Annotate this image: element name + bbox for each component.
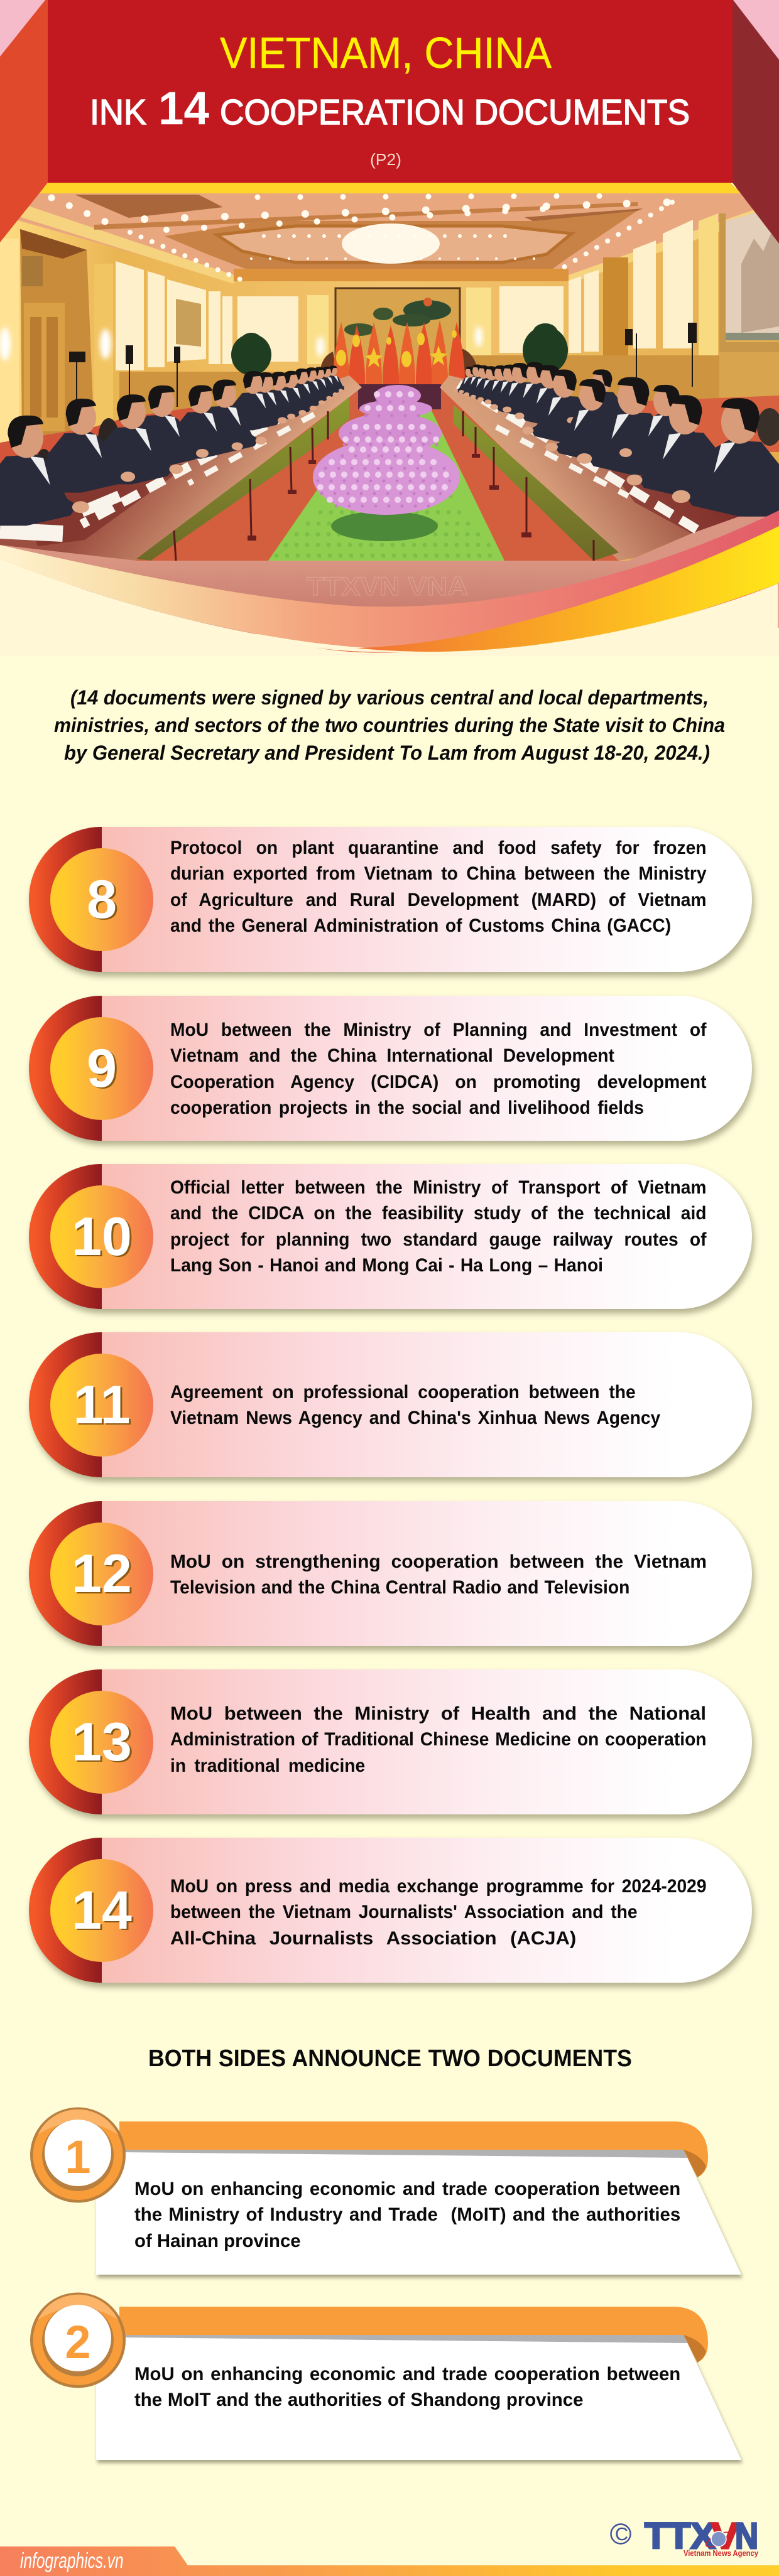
logo: TTXVN [610,2518,759,2558]
card 1 text: of Hainan province [134,2231,301,2251]
photo: delegates left [0,365,348,525]
logo: copyright mark: C [615,2525,628,2545]
footer bar [0,2546,779,2576]
item 10 text: project for planning two standard gauge railway routes of [170,1229,707,1250]
item 13 text: in traditional medicine [170,1755,365,1776]
item 9 text: MoU between the Ministry of Planning and Investment of [170,1020,707,1040]
item 8 text: durian exported from Vietnam to China between the Ministry [170,863,707,884]
item 14 panel [27,1838,758,1991]
number 12: 12 [72,1544,132,1604]
photo: ceiling [0,188,779,284]
number 9: 9 [87,1038,117,1099]
card 2 text [134,2363,680,2410]
number 14: 14 [72,1880,132,1941]
item 8 panel [27,827,758,980]
card 1 [30,2107,744,2280]
item 14 text: MoU on press and media exchange programme for 2024-2029 [170,1876,707,1897]
section heading: BOTH SIDES ANNOUNCE TWO DOCUMENTS [148,2045,632,2072]
item 14 text: All-China Journalists Association (ACJA) [170,1928,576,1949]
item 8 text: Protocol on plant quarantine and food safety for frozen [170,838,707,858]
photo: painting [335,288,460,385]
photo: table right [440,375,779,561]
intro text [54,686,725,764]
header with conference photo [0,0,779,653]
photo: meeting room [0,188,779,634]
item 9 text [170,1020,707,1118]
item 10 panel [27,1164,758,1317]
item 12 text: Television and the China Central Radio and Television [170,1577,629,1598]
item 10 text: Lang Son - Hanoi and Mong Cai - Ha Long – Hanoi [170,1255,603,1276]
card 2 text: MoU on enhancing economic and trade cooperation between [134,2363,680,2385]
card 2 text: the MoIT and the authorities of Shandong province [134,2390,583,2410]
item 11 text: Vietnam News Agency and China's Xinhua News Agency [170,1408,660,1428]
intro text: (14 documents were signed by various central and local departments, [70,686,709,709]
item 10 text: Official letter between the Ministry of Transport of Vietnam [170,1177,707,1198]
item 11 text: Agreement on professional cooperation between the [170,1382,636,1403]
item 8 text [170,838,707,936]
number 8: 8 [87,870,117,930]
card 2 number: 2 [65,2315,91,2368]
card 1 text: the Ministry of Industry and Trade (MoIT) and the authorities [134,2204,680,2225]
number 10: 10 [72,1207,132,1267]
photo: green foliage [268,408,504,561]
item 13 text: MoU between the Ministry of Health and the National [170,1703,706,1724]
photo: flags [333,320,465,384]
photo: table left [0,375,362,561]
photo: documents on the table [0,384,704,534]
item 10 text: and the CIDCA on the feasibility study of the technical aid [170,1203,707,1224]
title line 2: COOPERATION DOCUMENTS [220,92,690,132]
item 8 text: and the General Administration of Customs China (GACC) [170,915,671,936]
photo: floor and carpet [0,384,779,561]
item 13 text [170,1703,707,1776]
item 9 panel [27,996,758,1149]
logo: copyright mark [611,2524,631,2545]
card 2 [30,2293,744,2466]
title line 1: VIETNAM, CHINA [220,28,552,77]
title line 2 [90,82,690,134]
photo: watermark: TTXVN VNA [307,571,468,601]
logo: letters [645,2516,758,2557]
number 13: 13 [72,1712,132,1772]
number 11: 11 [74,1375,130,1435]
photo: delegates right [454,362,779,517]
item 10 text [170,1177,707,1276]
photo: orchid flowers [313,385,460,541]
red title banner [48,0,733,183]
photo: plants [231,323,568,375]
card 1 text [134,2179,680,2251]
item 9 text: cooperation projects in the social and livelihood fields [170,1097,644,1118]
item 14 text [170,1876,707,1949]
item 12 text [170,1551,707,1598]
part label: (P2) [370,150,401,169]
curved swoosh [0,510,779,656]
title line 2: INK [90,92,146,132]
photo: stanchions [174,411,594,561]
logo: globe [704,2529,733,2550]
item 8 text: of Agriculture and Rural Development (MARD) of Vietnam [170,890,707,910]
top right fold [733,0,779,244]
intro text: by General Secretary and President To Lam from August 18-20, 2024.) [64,741,710,764]
card 1 text: MoU on enhancing economic and trade cooperation between [134,2179,680,2199]
item 11 text [170,1382,660,1428]
item 11 panel [27,1332,758,1485]
top left fold [0,0,48,242]
item 9 text: Cooperation Agency (CIDCA) on promoting development [170,1072,707,1092]
item 9 text: Vietnam and the China International Development [170,1045,614,1066]
item 13 panel [27,1669,758,1823]
item 14 text: between the Vietnam Journalists' Association and the [170,1902,638,1922]
title line 2: 14 [158,82,209,134]
photo: front table [0,502,779,634]
photo: speakers [69,323,697,416]
photo: carved chairs [320,348,479,386]
yellow band [40,183,741,193]
item 12 text: MoU on strengthening cooperation between the Vietnam [170,1551,707,1572]
item 13 text: Administration of Traditional Chinese Medicine on cooperation [170,1729,707,1750]
photo: wall panels [0,206,779,452]
item 12 panel [27,1501,758,1654]
footer site name: infographics.vn [20,2549,124,2573]
card 1 number: 1 [65,2131,91,2183]
